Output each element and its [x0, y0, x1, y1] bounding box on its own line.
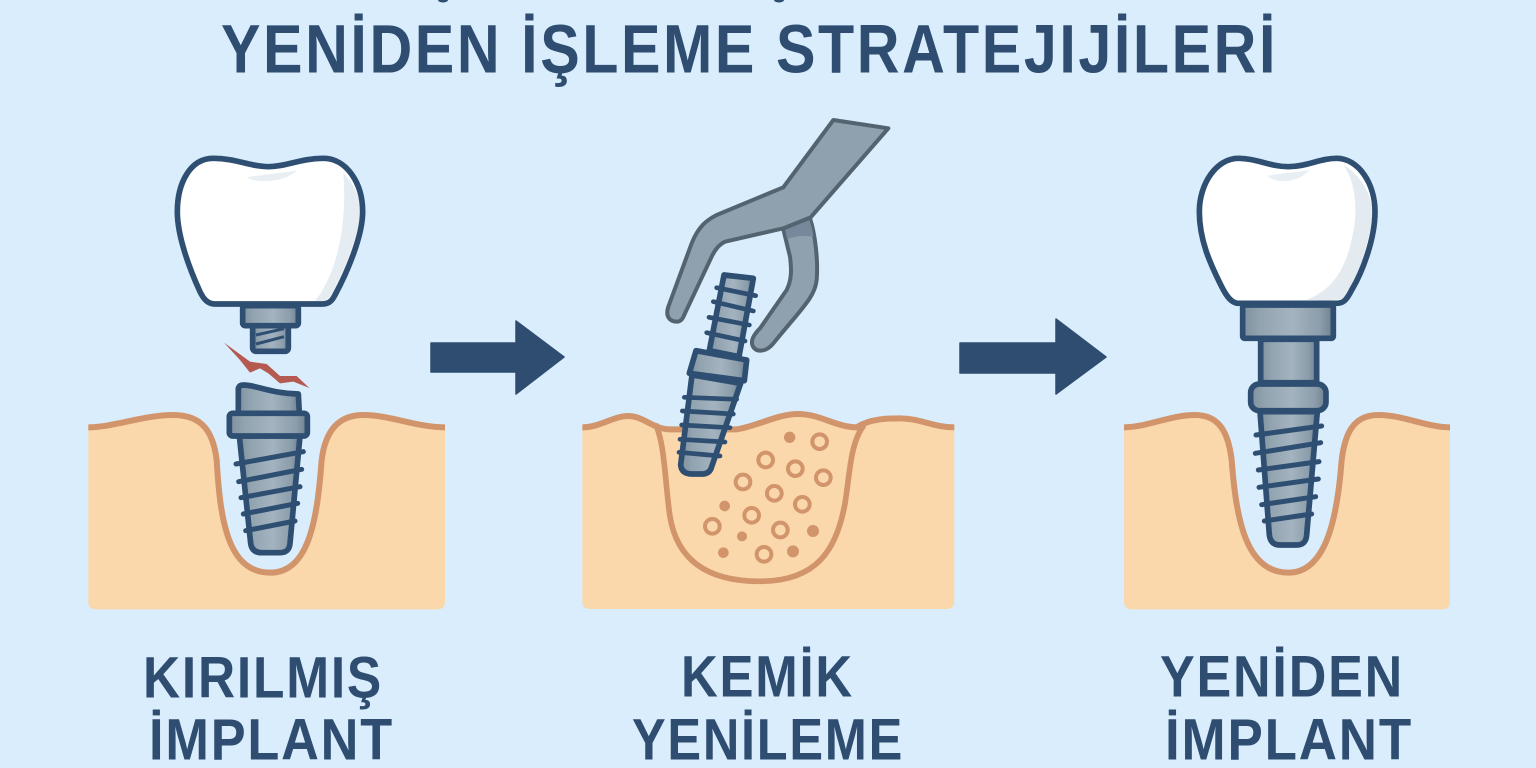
title: YENİDEN İŞLEME STRATEJIJİLERİ: [221, 11, 1278, 88]
tooth crown: [1199, 158, 1375, 303]
extracted implant: [679, 275, 756, 474]
gum outline: [88, 415, 445, 573]
implant and abutment: [1243, 305, 1333, 545]
label: new implant: YENİDEN: [1160, 644, 1404, 709]
gum with socket: [88, 415, 445, 609]
arrow 1: [431, 321, 564, 394]
label: broken implant: [143, 645, 394, 768]
clipped line above the title: [438, 0, 784, 2]
broken implant body: [229, 385, 307, 553]
tooth crown: [177, 158, 363, 304]
gum with socket: [1124, 415, 1450, 609]
graft outline: [655, 424, 864, 581]
upper abutment fragment: [243, 306, 298, 351]
label: new implant: [1160, 644, 1413, 768]
bone base: [582, 414, 954, 609]
label: broken implant: KIRILMIŞ: [143, 645, 383, 710]
label: bone regeneration: [632, 644, 904, 768]
panel: new implant: [1124, 158, 1450, 609]
label: bone regeneration: KEMİK: [681, 644, 854, 709]
panel: broken implant: [88, 158, 445, 609]
gum outline: [1124, 415, 1450, 573]
forceps: [667, 120, 888, 351]
bone outline: [582, 414, 954, 429]
crack mark: [224, 343, 309, 388]
panel: bone regeneration: [582, 120, 954, 609]
arrow 2: [960, 319, 1106, 394]
graft particles: [705, 432, 831, 562]
